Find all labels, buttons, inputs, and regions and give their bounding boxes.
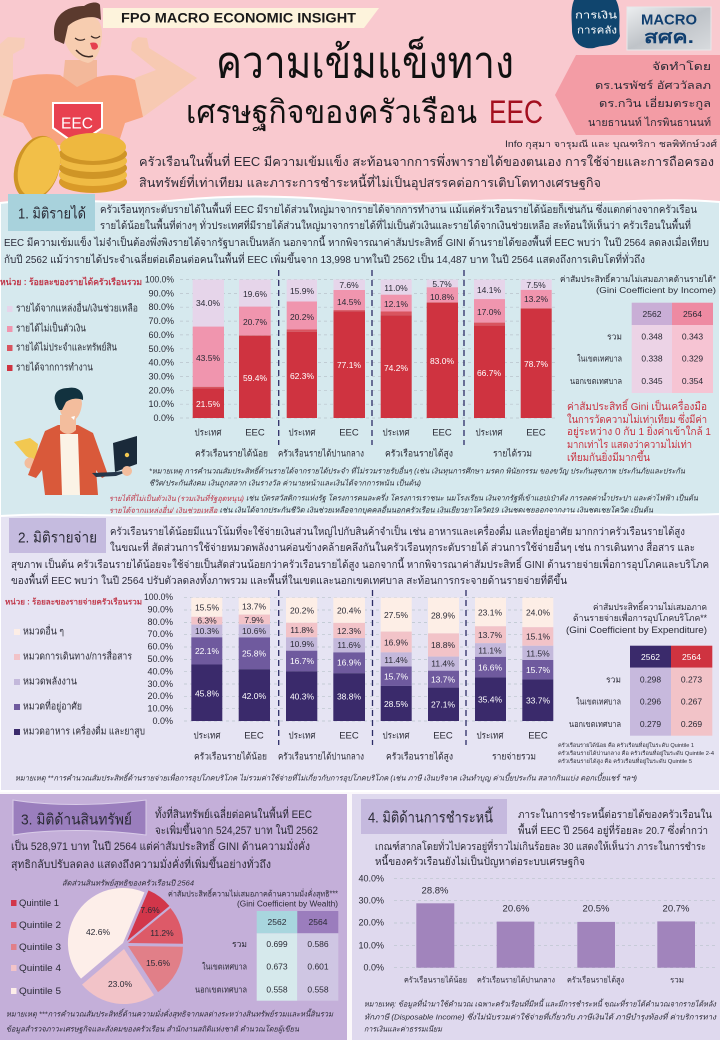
panel: income section (0, 196, 720, 520)
x labels: ครัวเรือนรายได้สูง (386, 750, 453, 762)
chart: debt burden bars: 0.0% (363, 963, 384, 973)
heading: section 4 (361, 799, 507, 834)
table: gini income: ในเขตเทศบาล (577, 354, 622, 364)
table: gini wealth: 2562 (268, 917, 287, 927)
chart: debt burden bars: 20.6% (503, 904, 530, 914)
bar values: 43.5% (196, 353, 220, 363)
notes: income (109, 466, 699, 514)
bar values: 45.8% (195, 688, 219, 698)
panel: authors: ดร.นรพัชร์ อัศววัลลภ (595, 79, 711, 92)
y axis (145, 274, 174, 423)
panel: expenditure section (0, 513, 720, 791)
chart: wealth pie: 42.6% (86, 927, 110, 937)
legend: expenditure: หมวดพลังงาน (23, 676, 77, 688)
bar values: 20.4% (337, 606, 361, 616)
panel: authors: นายธานนท์ ไกรพินธานนท์ (588, 116, 711, 129)
table: gini wealth: ในเขตเทศบาล (202, 962, 247, 972)
y axis: 60.0% (148, 330, 174, 340)
table: gini expenditure: ด้านรายจ่ายเพื่อการอุปโภคบริโภค** (573, 611, 707, 624)
legend: quintiles: Quintile 3 (19, 942, 61, 952)
x labels: ประเทศ (288, 730, 316, 742)
logo: finance: การเงิน (575, 10, 617, 22)
chart: debt burden bars: 40.0% (358, 873, 384, 883)
logo: macro: MACRO (641, 12, 697, 28)
bar values: 11.8% (290, 625, 314, 635)
notes: quintile definitions: ครัวเรือนรายได้ปานกลาง คือ ครัวเรือนที่อยู่ในระดับ Quintile 2-4 (558, 749, 714, 757)
legend: expenditure (5, 596, 145, 738)
table: gini income: 0.354 (682, 376, 703, 386)
banner: series title: FPO MACRO ECONOMIC INSIGHT (121, 10, 357, 26)
chart: debt burden bars (358, 873, 715, 986)
logo: macro (627, 7, 711, 50)
bar values: 13.7% (478, 630, 502, 640)
table: gini income: ค่าสัมประสิทธิ์ความไม่เสมอภาคด้านรายได้* (560, 273, 717, 284)
bar values: 40.3% (290, 692, 314, 702)
bar values: 33.7% (526, 696, 550, 706)
table: gini income: นอกเขตเทศบาล (570, 376, 622, 386)
y axis: 50.0% (147, 654, 173, 664)
x labels: ประเทศ (288, 428, 316, 438)
y axis: 70.0% (148, 316, 174, 326)
table: gini wealth: 0.699 (266, 939, 288, 949)
bar values: 11.1% (478, 646, 502, 656)
table: gini wealth: 2564 (309, 917, 328, 927)
info credit: Info กุสุมา จารุมณี และ บุณฑริกา ชลพิทักษ์วงศ์ (505, 138, 717, 150)
table: gini income: 0.345 (641, 376, 663, 386)
table: gini expenditure (566, 600, 712, 736)
chart: debt burden bars: 20.5% (583, 904, 610, 914)
illustration: man with laptop (14, 388, 137, 495)
callout: gini explanation: ค่าสัมประสิทธิ์ Gini เป็นเครื่องมือ (567, 398, 707, 413)
legend: income: หน่วย : ร้อยละของรายได้ครัวเรือนรวม (0, 276, 142, 287)
table: gini income: 0.329 (682, 354, 703, 364)
title: เศรษฐกิจของครัวเรือน (186, 94, 477, 132)
title: EEC (489, 94, 543, 130)
table: gini wealth: 0.673 (266, 962, 288, 972)
bar values: 16.6% (478, 662, 502, 672)
bar values: 15.5% (195, 602, 219, 612)
bar values: 5.7% (432, 279, 452, 289)
table: gini wealth (168, 888, 338, 1001)
chart: debt burden bars: ครัวเรือนรายได้สูง (567, 976, 624, 986)
bar values: 83.0% (430, 356, 454, 366)
y axis: 0.0% (152, 716, 173, 726)
bar values: 24.0% (526, 608, 550, 618)
callout: gini explanation: อยู่ระหว่าง 0 กับ 1 ยิ่งค่าเข้าใกล้ 1 (567, 424, 711, 438)
panel: authors: ดร.กวิน เอี่ยมตระกูล (599, 96, 711, 110)
panel: authors (555, 55, 720, 135)
table: gini wealth: รวม (232, 939, 247, 949)
notes: debt: การเงินและค่าธรรมเนียม (364, 1024, 443, 1034)
bar values: 35.4% (478, 694, 502, 704)
x labels: ประเทศ (194, 428, 222, 438)
notes: wealth: หมายเหตุ ***การคำนวณสัมประสิทธิ์ด้านความมั่งคั่งสุทธิจากผลต่างระหว่างสินทรัพย์รวมและหนี้สินรวม (6, 1008, 334, 1018)
bar values: 10.8% (430, 292, 454, 302)
chart: debt burden bars: รวม (670, 976, 684, 984)
bar values: 10.9% (290, 639, 314, 649)
x labels: ประเทศ (382, 730, 410, 742)
notes: wealth: ข้อมูลสำรวจภาวะเศรษฐกิจและสังคมของครัวเรือน สำนักงานสถิติแห่งชาติ คำนวณโดยผู้เขียน (6, 1024, 300, 1034)
table: gini income: รวม (607, 332, 622, 342)
text: section 3: สุทธิกลับปรับลดลง แสดงถึงความมั่งคั่งที่เพิ่มขึ้นอย่างทั่วถึง (11, 856, 271, 871)
table: gini expenditure: 2564 (682, 652, 701, 662)
table: gini income: (Gini Coefficient by Income) (596, 285, 716, 295)
table: gini wealth: ค่าสัมประสิทธิ์ความไม่เสมอภาคด้านความมั่งคั่งสุทธิ*** (168, 888, 338, 898)
chart: debt burden bars: 20.7% (663, 904, 690, 914)
y axis: 20.0% (148, 385, 174, 395)
table: gini expenditure: ในเขตเทศบาล (576, 697, 621, 707)
legend: quintiles: Quintile 2 (19, 920, 61, 930)
intro text (139, 152, 714, 191)
bars (193, 280, 552, 418)
callout: gini explanation: เทียมกันยิ่งมีมากขึ้น (567, 450, 650, 464)
notes: wealth (6, 1008, 334, 1034)
bar values: 17.0% (477, 307, 501, 317)
table: gini expenditure: นอกเขตเทศบาล (569, 719, 621, 729)
bar values: 18.8% (431, 640, 455, 650)
intro text: ครัวเรือนในพื้นที่ EEC มีความเข้มแข็ง สะท้อนจากการพึ่งพารายได้ของตนเอง การใช้จ่ายและการถือครอง (139, 152, 714, 169)
bar values: 16.7% (290, 656, 314, 666)
heading: section 1: 1. มิติรายได้ (18, 204, 86, 222)
bar values: 11.5% (526, 648, 550, 658)
notes: income: รายได้จากแหล่งอื่น/ เงินช่วยเหลือ เช่น เงินได้จากประกันชีวิต เงินช่วยเหลือจากบุคคลอื่นนอกครัวเรือน เงินเยียวยาโควิด19 เงินชดเชยออกจากงาน เงินชดเชยโควิด เป็นต้น (109, 504, 654, 514)
heading: section 3: 3. มิติด้านสินทรัพย์ (21, 812, 132, 828)
bar values (195, 602, 550, 709)
x labels: EEC (339, 730, 359, 742)
table: gini expenditure: 0.269 (681, 719, 702, 729)
x labels: EEC (244, 730, 264, 742)
table: gini wealth: 0.586 (307, 939, 329, 949)
x labels: ครัวเรือนรายได้สูง (385, 448, 453, 460)
y axis: 30.0% (147, 679, 173, 689)
x labels: EEC (432, 428, 452, 438)
legend: expenditure: หน่วย : ร้อยละของรายจ่ายครัวเรือนรวม (5, 596, 142, 606)
chart: expenditure stacked bars (144, 590, 555, 762)
illustration: muscular man (0, 2, 197, 145)
header background (0, 0, 720, 210)
bars (191, 598, 553, 721)
y axis: 30.0% (148, 372, 174, 382)
bar values: 42.0% (242, 691, 266, 701)
x labels: ครัวเรือนรายได้ปานกลาง (278, 750, 364, 762)
table: gini expenditure: 0.279 (640, 719, 661, 729)
illustration: coins (6, 130, 127, 206)
x labels (194, 730, 548, 762)
y axis: 20.0% (147, 691, 173, 701)
bar values: 22.1% (195, 646, 219, 656)
y axis: 90.0% (147, 604, 173, 614)
y axis: 90.0% (148, 288, 174, 298)
bar values: 21.5% (196, 399, 220, 409)
bar values: 11.6% (337, 640, 361, 650)
text: section 3: เป็น 528,971 บาท ในปี 2564 แต่ค่าสัมประสิทธิ์ GINI ด้านความมั่งคั่ง (11, 838, 310, 853)
title (186, 36, 543, 132)
panel: wealth section (0, 794, 347, 1040)
text: section 3: ทั้งที่สินทรัพย์เฉลี่ยต่อคนในพื้นที่ EEC (155, 806, 312, 821)
panel: debt section (352, 794, 720, 1040)
x labels: ประเทศ (476, 428, 502, 438)
bar values: 62.3% (290, 371, 314, 381)
bar values: 11.4% (384, 655, 408, 665)
intro text: สินทรัพย์ที่เท่าเทียม และภาระการชำระหนี้ที่ไม่เป็นอุปสรรคต่อการเติบโตทางเศรษฐกิจ (139, 173, 601, 191)
bar values: 16.9% (337, 657, 361, 667)
text: section 4: พื้นที่ EEC ปี 2564 อยู่ที่ร้อยละ 20.7 ซึ่งต่ำกว่า (518, 823, 708, 837)
x labels: รายจ่ายรวม (492, 752, 536, 762)
y axis: 80.0% (147, 617, 173, 627)
chart: wealth pie: 15.6% (146, 958, 170, 968)
text: section 2: ครัวเรือนรายได้น้อยมีแนวโน้มที่จะใช้จ่ายเงินส่วนใหญ่ไปกับสินค้าจำเป็น เช่น อาหารและเครื่องดื่ม และที่อยู่อาศัย มากกว่าครัวเรือนรายได้สูง (110, 524, 685, 538)
legend: expenditure: หมวดการเดินทาง/การสื่อสาร (23, 648, 133, 662)
callout: gini explanation: ในการวัดความไม่เท่าเทียม ซึ่งมีค่า (567, 412, 707, 426)
text: section 2 (11, 524, 709, 587)
bar values: 13.2% (524, 294, 548, 304)
y axis: 100.0% (145, 274, 174, 284)
x labels: EEC (526, 428, 546, 438)
table: gini income (560, 273, 717, 393)
bar values: 10.6% (242, 626, 266, 636)
text: section 4: ภาระในการชำระหนี้ต่อรายได้ของครัวเรือนใน (518, 807, 712, 821)
chart: income stacked bars (145, 270, 558, 460)
note: expenditure: หมายเหตุ **การคำนวณสัมประสิทธิ์ด้านรายจ่ายเพื่อการอุปโภคบริโภค ไม่รวมค่าใช้จ่ายที่ไม่เกี่ยวกับการอุปโภคบริโภค (เช่น ภาษี เงินบริจาค เงินทำบุญ ค่าเบี้ยประกัน สลากกินแบ่ง ดอกเบี้ยแชร์ ฯลฯ) (15, 772, 637, 782)
table: gini expenditure: 0.267 (681, 697, 702, 707)
chart: wealth pie: 23.0% (108, 979, 132, 989)
text: section 3 (11, 806, 318, 871)
bar values: 59.4% (243, 373, 267, 383)
y axis: 40.0% (147, 666, 173, 676)
x labels: ประเทศ (194, 730, 220, 742)
legend: expenditure: หมวดอาหาร เครื่องดื่ม และยาสูบ (23, 724, 145, 738)
table: gini wealth: 0.558 (307, 984, 329, 994)
x labels: ประเทศ (476, 730, 504, 742)
table: gini wealth: 0.558 (266, 984, 288, 994)
heading: section 3 (13, 800, 146, 835)
bar values: 12.3% (337, 626, 361, 636)
legend: income: รายได้ไม่เป็นตัวเงิน (16, 320, 86, 334)
banner: series title (103, 8, 379, 28)
y axis (144, 592, 173, 726)
legend: income: รายได้จากการทำงาน (16, 362, 93, 374)
bar values: 15.7% (384, 672, 408, 682)
table: gini expenditure: รวม (606, 674, 621, 684)
panel: authors: จัดทำโดย (652, 60, 711, 73)
notes: income: ชีวิต/ประกันสังคม เงินถูกสลาก เงินรางวัล ค่านายหน้าและเงินได้จากการพนัน เป็นต้น) (149, 478, 422, 488)
legend: expenditure: หมวดที่อยู่อาศัย (23, 698, 82, 712)
y axis: 80.0% (148, 302, 174, 312)
chart: wealth pie (68, 888, 183, 1004)
logo: finance (572, 0, 620, 48)
notes: debt: หักภาษี (Disposable Income) ซึ่งไม่นับรวมค่าใช้จ่ายที่เกี่ยวกับ ภาษีเงินได้ ภาษีบำรุงท้องที่ ค่าบริการทาง (364, 1012, 717, 1022)
y axis: 10.0% (148, 399, 174, 409)
table: gini expenditure: 0.296 (640, 697, 661, 707)
chart: wealth pie: 7.6% (140, 905, 160, 915)
chart: debt burden bars: 28.8% (422, 886, 449, 896)
text: section 2: ของพื้นที่ EEC พบว่า ในปี 2564 ปรับตัวลดลงทั้งภาพรวม และพื้นที่ในเขตและนอกเขตเทศบาล สะท้อนการกระจายด้านรายจ่ายที่ดีขึ้น (11, 573, 567, 587)
chart: debt burden bars: 20.0% (358, 918, 384, 928)
x labels: EEC (339, 428, 359, 438)
x labels: EEC (433, 730, 453, 742)
bar values: 13.7% (242, 602, 266, 612)
chart: debt burden bars: ครัวเรือนรายได้น้อย (404, 976, 467, 984)
bar values: 74.2% (384, 363, 408, 373)
heading: section 1 (8, 194, 95, 231)
table: gini expenditure: (Gini Coefficient by Expenditure) (566, 625, 707, 635)
notes: quintile definitions: ครัวเรือนรายได้น้อย คือ ครัวเรือนที่อยู่ในระดับ Quintile 1 (558, 741, 694, 749)
bar values: 23.1% (478, 607, 502, 617)
bar values: 15.9% (290, 286, 314, 296)
bar values: 20.2% (290, 606, 314, 616)
bar values: 78.7% (524, 359, 548, 369)
legend: income (0, 276, 142, 374)
bar values: 10.3% (195, 626, 219, 636)
bar values: 25.8% (242, 648, 266, 658)
bar values: 66.7% (477, 368, 501, 378)
chart: debt burden bars: 30.0% (358, 895, 384, 905)
title: ความเข้มแข็งทาง (216, 36, 514, 88)
illustration: muscular man: EEC (61, 116, 93, 132)
legend: income: รายได้จากแหล่งอื่น/เงินช่วยเหลือ (16, 300, 138, 314)
bar values: 28.5% (384, 699, 408, 709)
x labels: ครัวเรือนรายได้ปานกลาง (278, 448, 364, 460)
bar values: 11.0% (384, 283, 408, 293)
notes: quintile definitions (558, 741, 714, 765)
bar values: 16.9% (384, 637, 408, 647)
chart: wealth pie: 11.2% (150, 928, 174, 938)
bar values: 7.9% (244, 615, 264, 625)
bar values: 77.1% (337, 360, 361, 370)
heading: section 2: 2. มิติรายจ่าย (18, 530, 97, 546)
table: gini income: 0.343 (682, 332, 703, 342)
text: section 4: หนี้ของครัวเรือนยังไม่เป็นปัญหาต่อระบบเศรษฐกิจ (375, 854, 585, 868)
text: section 4 (375, 807, 712, 868)
bar values: 38.8% (337, 692, 361, 702)
chart: debt burden bars: 10.0% (358, 940, 384, 950)
bar values: 15.1% (526, 632, 550, 642)
y axis: 40.0% (148, 358, 174, 368)
legend: quintiles: Quintile 5 (19, 986, 61, 996)
logo: macro: สศค. (644, 27, 694, 47)
bar values: 14.5% (337, 297, 361, 307)
legend: quintiles: Quintile 1 (19, 898, 59, 908)
x labels: EEC (245, 428, 265, 438)
x labels (194, 428, 546, 460)
legend: quintiles: Quintile 4 (19, 963, 61, 973)
bar values (196, 279, 548, 409)
x labels: รายได้รวม (493, 448, 532, 460)
bar values: 20.2% (290, 312, 314, 322)
legend: expenditure: หมวดอื่น ๆ (23, 624, 64, 638)
pie title: สัดส่วนสินทรัพย์สุทธิของครัวเรือนปี 2564 (62, 878, 194, 888)
notes: income: รายได้ที่ไม่เป็นตัวเงิน (รวมเงินที่รัฐอุดหนุน) เช่น บัตรสวัสดิการแห่งรัฐ โครงการคนละครึ่ง โครงการเราชนะ นมโรงเรียน เงินจากรัฐที่เข้าแอปเป๋าตัง การลดค่าน้ำประปา และค่าไฟฟ้า เป็นต้น (109, 492, 699, 502)
bar values: 14.1% (477, 285, 501, 295)
x labels: EEC (528, 730, 548, 742)
text: section 1: กับปี 2562 แม้ว่ารายได้ประจำเฉลี่ยต่อเดือนต่อคนในพื้นที่ EEC เพิ่มขึ้นจาก 13,998 บาทในปี 2562 เป็น 14,487 บาท ในปี 2564 แสดงถึงการเติบโตที่ทั่วถึง (4, 252, 645, 266)
x labels: ประเทศ (382, 428, 410, 438)
bar values: 12.1% (384, 299, 408, 309)
table: gini expenditure: 0.273 (681, 674, 702, 684)
table: gini income: 0.348 (641, 332, 663, 342)
bar values: 11.4% (431, 658, 455, 668)
bar values: 34.0% (196, 298, 220, 308)
table: gini expenditure: 2562 (641, 652, 660, 662)
bar values: 19.6% (243, 289, 267, 299)
table: gini wealth: (Gini Coefficient by Wealth) (237, 900, 338, 908)
y axis: 60.0% (147, 642, 173, 652)
bar values: 15.7% (526, 665, 550, 675)
y axis: 100.0% (144, 592, 173, 602)
notes: debt: หมายเหตุ: ข้อมูลที่นำมาใช้คำนวณ เฉพาะครัวเรือนที่มีหนี้ และมีการชำระหนี้ ขณะที่รายได้คำนวณจากรายได้หลัง (364, 998, 717, 1008)
table: gini wealth: 0.601 (307, 962, 329, 972)
bar values: 7.6% (339, 280, 359, 290)
table: gini income: 0.338 (641, 354, 663, 364)
x labels: ครัวเรือนรายได้น้อย (194, 750, 267, 762)
bar values: 28.9% (431, 611, 455, 621)
legend: quintiles (11, 898, 61, 996)
y axis: 50.0% (148, 344, 174, 354)
text: section 1 (4, 202, 709, 266)
bar values: 27.5% (384, 610, 408, 620)
notes: quintile definitions: ครัวเรือนรายได้สูง คือ ครัวเรือนที่อยู่ในระดับ Quintile 5 (558, 757, 692, 765)
chart: debt burden bars: ครัวเรือนรายได้ปานกลาง (477, 976, 555, 984)
bar values: 7.5% (526, 280, 546, 290)
logo: finance: การคลัง (577, 26, 617, 36)
y axis: 0.0% (153, 413, 174, 423)
text: section 3: จะเพิ่มขึ้นจาก 524,257 บาท ในปี 2562 (155, 822, 318, 837)
y axis: 70.0% (147, 629, 173, 639)
legend: income: รายได้ไม่ประจำและทรัพย์สิน (16, 342, 117, 354)
table: gini wealth: นอกเขตเทศบาล (195, 984, 247, 994)
table: gini expenditure: ค่าสัมประสิทธิ์ความไม่เสมอภาค (593, 600, 707, 612)
table: gini expenditure: 0.298 (640, 674, 661, 684)
x labels: ครัวเรือนรายได้น้อย (195, 448, 268, 460)
heading: section 4: 4. มิติด้านการชำระหนี้ (368, 806, 493, 826)
table: gini income: 2562 (643, 309, 662, 319)
bar values: 27.1% (431, 699, 455, 709)
callout: gini explanation (567, 398, 711, 464)
table: gini income: 2564 (683, 309, 702, 319)
notes: income: *หมายเหตุ การคำนวณสัมประสิทธิ์ด้านรายได้จากรายได้ประจำ ที่ไม่รวมรายรับอื่นๆ (เช่น เงินทุนการศึกษา มรดก พินัยกรรม ของขวัญ ประกันสุขภาพ ประกันภัยและประกัน (149, 466, 686, 476)
callout: gini explanation: มากเท่าไร แสดงว่าความไม่เท่า (567, 438, 692, 451)
notes: debt (364, 998, 717, 1034)
y axis: 10.0% (147, 704, 173, 714)
heading: section 2 (9, 518, 106, 553)
bar values: 20.7% (243, 317, 267, 327)
bar values: 13.7% (431, 674, 455, 684)
bar values: 6.3% (197, 616, 217, 626)
